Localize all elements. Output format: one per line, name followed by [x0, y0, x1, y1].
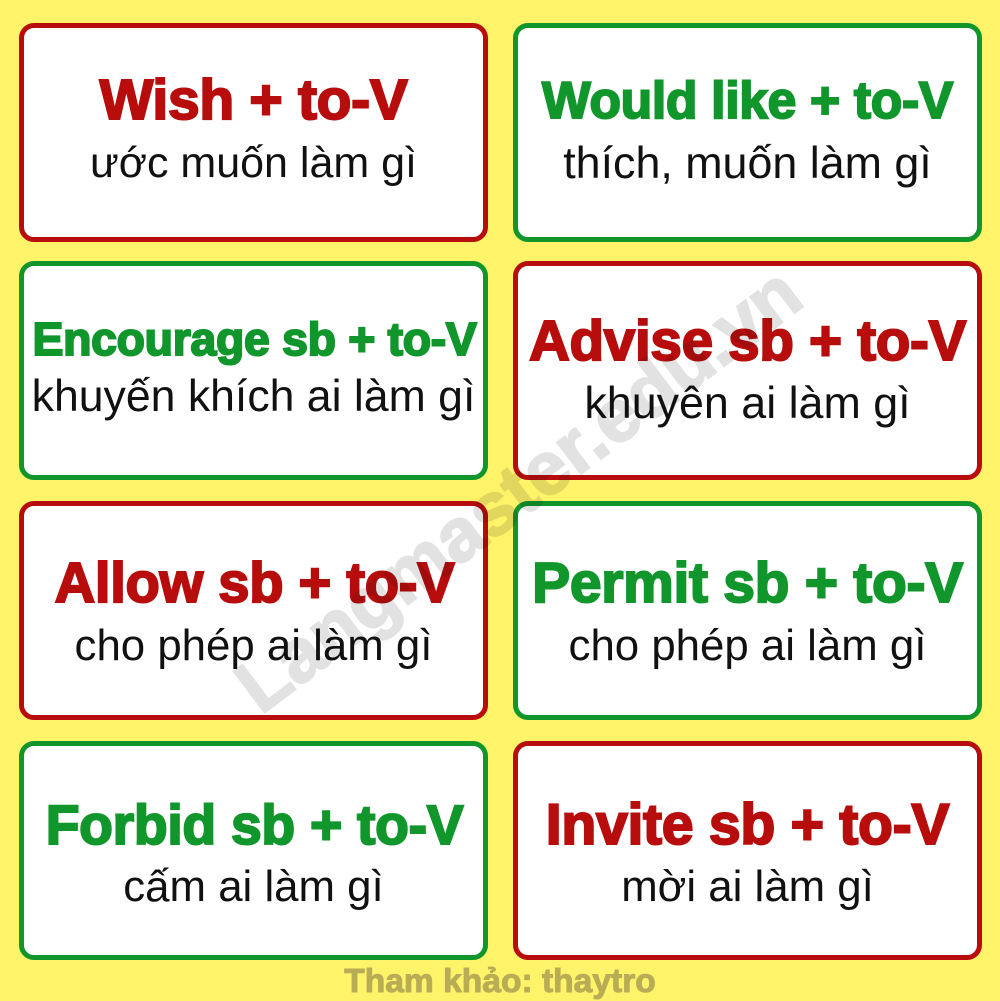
text: Encourage meaning: khuyến khích ai làm gì	[32, 372, 475, 421]
text: Would like meaning: thích, muốn làm gì	[563, 138, 932, 188]
panel: Permit	[513, 501, 982, 720]
text: Advise meaning: khuyên ai làm gì	[584, 378, 911, 428]
watermark: Langmaster.edu.vn	[220, 250, 816, 728]
heading: Encourage: Encourage sb + to-V	[32, 313, 477, 365]
text: Invite meaning: mời ai làm gì	[621, 862, 874, 911]
heading: Advise: Advise sb + to-V	[529, 309, 966, 372]
heading: Invite: Invite sb + to-V	[546, 793, 949, 857]
footer credit: Tham khảo: thaytro	[344, 963, 656, 1000]
heading: Would like: Would like + to-V	[542, 71, 953, 129]
heading: Allow: Allow sb + to-V	[55, 551, 454, 614]
panel: Invite	[513, 741, 982, 960]
text: Forbid meaning: cấm ai làm gì	[123, 862, 384, 911]
text: Allow meaning: cho phép ai làm gì	[75, 621, 432, 670]
panel: Encourage	[19, 261, 488, 480]
heading: Wish: Wish + to-V	[99, 68, 408, 132]
panel: Would like	[513, 23, 982, 242]
text: Permit meaning: cho phép ai làm gì	[569, 621, 926, 670]
heading: Forbid: Forbid sb + to-V	[46, 794, 463, 856]
text: Wish meaning: ước muốn làm gì	[90, 139, 417, 187]
panel: Forbid	[19, 741, 488, 960]
heading: Permit: Permit sb + to-V	[532, 551, 963, 615]
panel: Wish	[19, 23, 488, 242]
panel: Advise	[513, 261, 982, 480]
panel: Allow	[19, 501, 488, 720]
